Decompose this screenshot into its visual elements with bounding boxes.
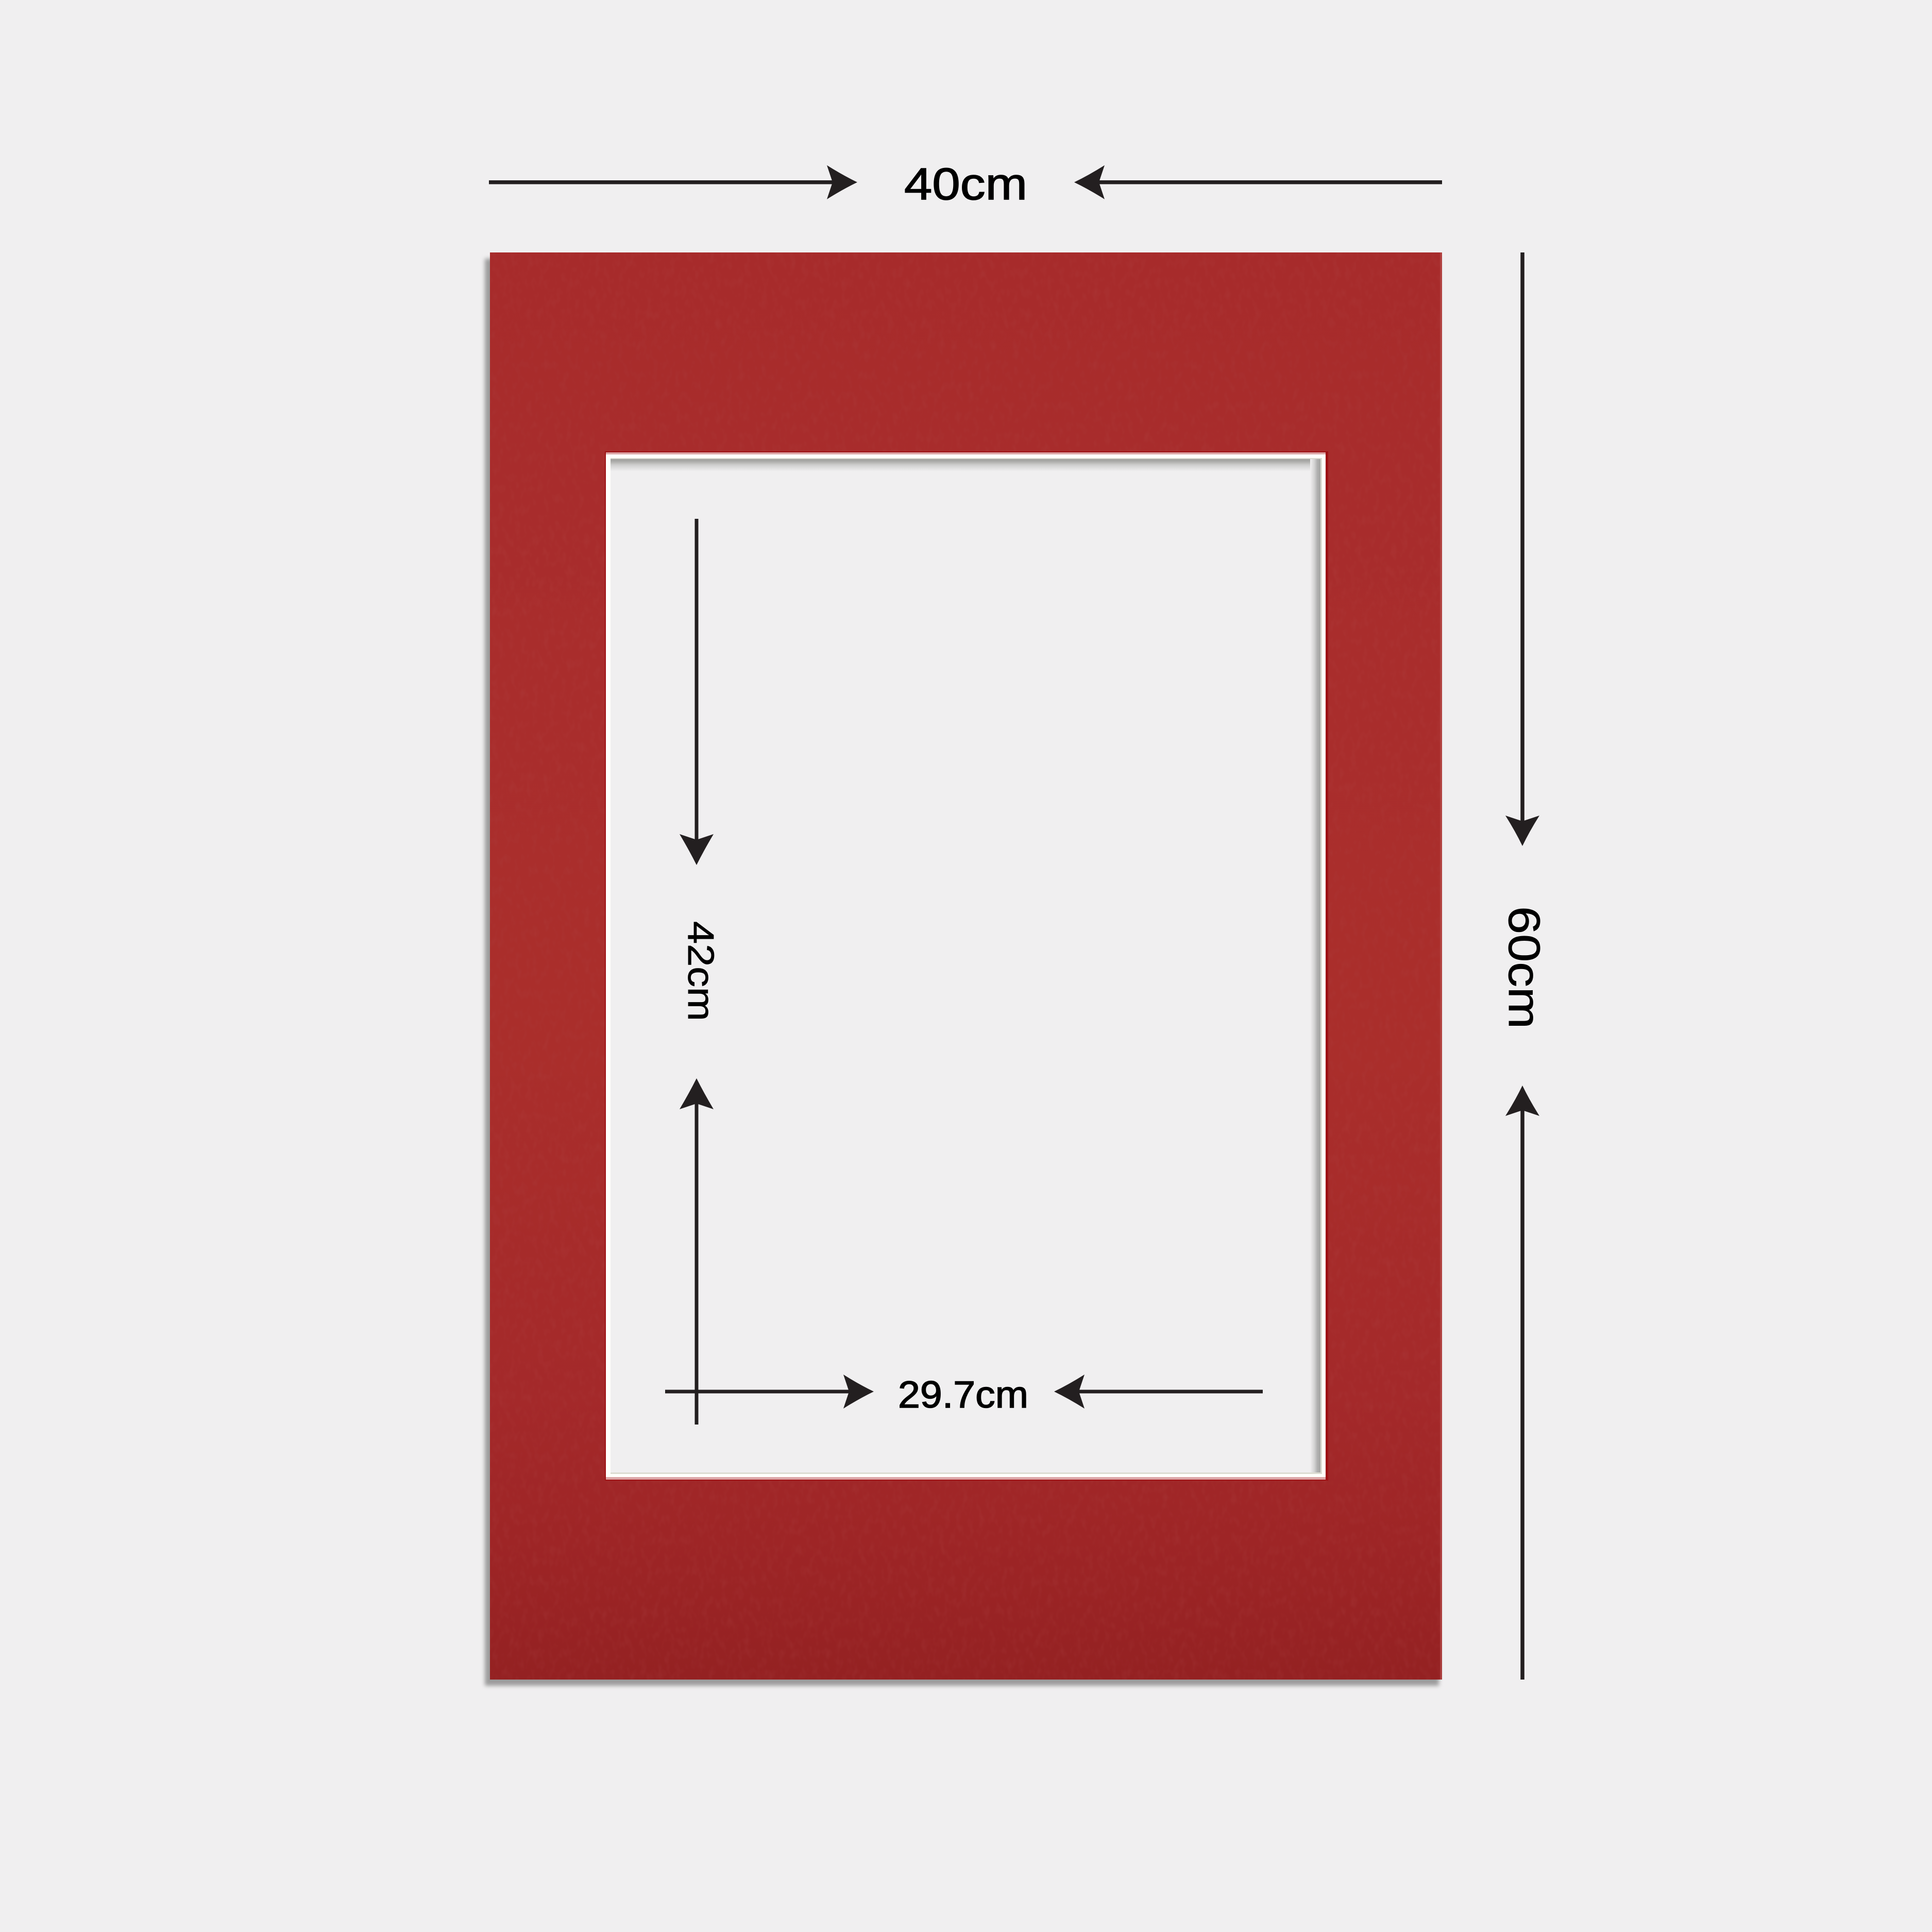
- arrow: 29.7cm right: [1054, 1375, 1263, 1409]
- label: 60cm: 60cm: [1499, 906, 1549, 1029]
- label: 40cm: 40cm: [904, 159, 1027, 209]
- label: 42cm: 42cm: [680, 921, 721, 1021]
- opening inner shadow: top: [611, 459, 1320, 471]
- mount board: [490, 252, 1442, 1680]
- arrow: 60cm top: [1505, 252, 1539, 846]
- mount right edge highlight: [1440, 252, 1442, 1680]
- panel: red picture mount: [485, 252, 1442, 1686]
- arrow: 29.7cm left: [665, 1375, 874, 1409]
- mount opening: [605, 451, 1328, 1481]
- arrow: 40cm right: [1074, 165, 1442, 199]
- arrow: 60cm bottom: [1505, 1086, 1539, 1680]
- opening inner shadow: right: [1310, 459, 1320, 1472]
- arrow: 40cm left: [489, 165, 857, 199]
- label: 29.7cm: 29.7cm: [898, 1374, 1028, 1416]
- arrow: 42cm bottom: [680, 1078, 714, 1425]
- mount drop shadow: [485, 259, 1439, 1686]
- arrow: 42cm top: [680, 519, 714, 865]
- mount paper texture: [490, 252, 1442, 1680]
